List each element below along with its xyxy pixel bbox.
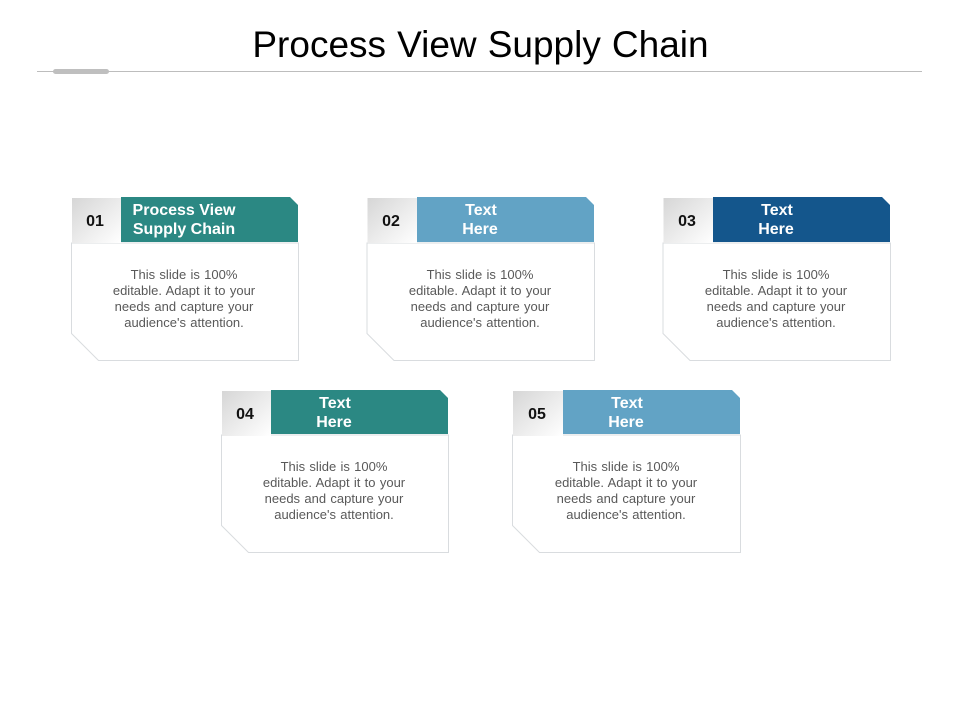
panel: card 01: editable. Adapt it to your bbox=[113, 283, 256, 298]
panel: card 03: Here bbox=[758, 221, 794, 238]
panel: card 05: needs and capture your bbox=[557, 491, 696, 506]
panel: card 05: audience's attention. bbox=[566, 507, 686, 522]
panel: card 05: This slide is 100% bbox=[573, 459, 680, 474]
panel: card 01: needs and capture your bbox=[115, 299, 254, 314]
panel: card 03: audience's attention. bbox=[716, 315, 836, 330]
panel: card 02 bbox=[367, 197, 594, 360]
panel: card 04 bbox=[222, 390, 448, 552]
panel: card 03: Text bbox=[761, 202, 794, 219]
panel: card 04: needs and capture your bbox=[265, 491, 404, 506]
panel: card 03 bbox=[663, 197, 890, 360]
panel: card 02: This slide is 100% bbox=[427, 267, 534, 282]
panel: card 03: This slide is 100% bbox=[723, 267, 830, 282]
panel: card 02: Here bbox=[462, 221, 498, 238]
panel: card 01: 01 bbox=[86, 213, 104, 230]
panel: card 03: editable. Adapt it to your bbox=[705, 283, 848, 298]
panel: card 04: This slide is 100% bbox=[281, 459, 388, 474]
panel: card 02: editable. Adapt it to your bbox=[409, 283, 552, 298]
panel: card 01: audience's attention. bbox=[124, 315, 244, 330]
panel: card 01: Supply Chain bbox=[133, 221, 235, 238]
title: Process View Supply Chain bbox=[252, 24, 709, 65]
panel: card 04: Text bbox=[319, 395, 352, 412]
panel: card 05: 05 bbox=[528, 406, 546, 423]
panel: card 02: 02 bbox=[382, 213, 400, 230]
panel: card 02: audience's attention. bbox=[420, 315, 540, 330]
panel: card 03: 03 bbox=[678, 213, 696, 230]
panel: card 02: needs and capture your bbox=[411, 299, 550, 314]
panel: card 01 bbox=[72, 197, 298, 360]
panel: card 03: needs and capture your bbox=[707, 299, 846, 314]
panel: card 04: editable. Adapt it to your bbox=[263, 475, 406, 490]
title rule bbox=[37, 69, 922, 74]
panel: card 04: Here bbox=[316, 414, 352, 431]
panel: card 05: Here bbox=[608, 414, 644, 431]
panel: card 01: This slide is 100% bbox=[131, 267, 238, 282]
panel: card 04: 04 bbox=[236, 406, 254, 423]
panel: card 02: Text bbox=[465, 202, 498, 219]
panel: card 04: audience's attention. bbox=[274, 507, 394, 522]
panel: card 05 bbox=[512, 390, 740, 552]
panel: card 05: Text bbox=[611, 395, 644, 412]
panel: card 01: Process View bbox=[133, 202, 236, 219]
panel: card 05: editable. Adapt it to your bbox=[555, 475, 698, 490]
